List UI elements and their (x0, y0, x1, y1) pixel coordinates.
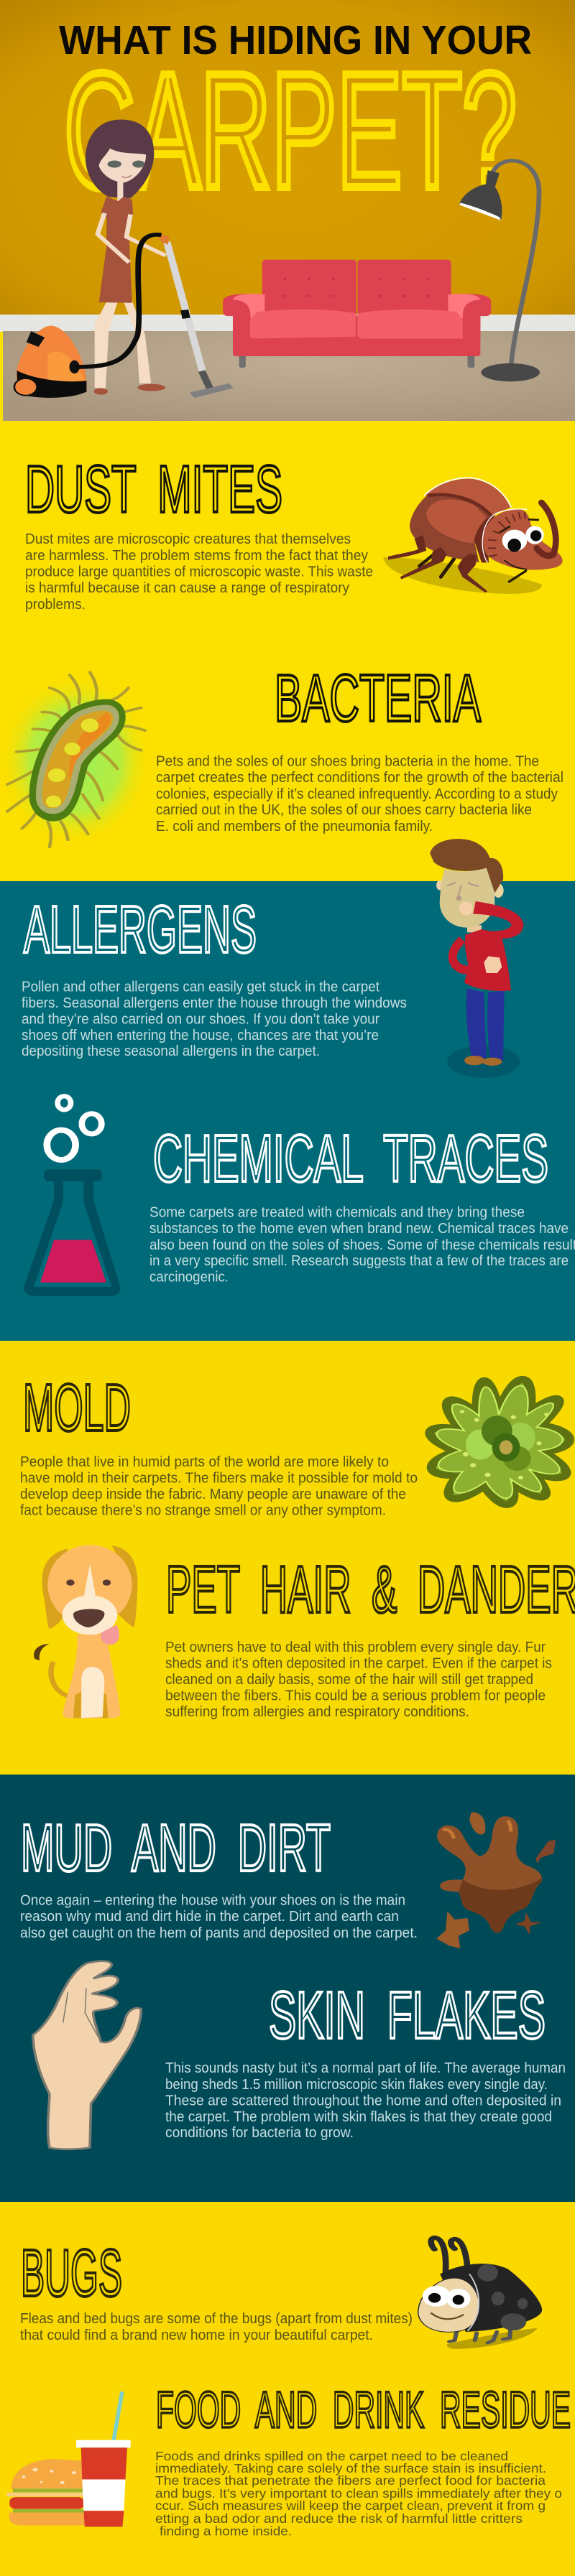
text: chemical traces: carcinogenic. (150, 1270, 229, 1285)
text: bacteria (156, 754, 564, 834)
yellow background (0, 1341, 575, 1775)
text: dust mites: Dust mites are microscopic creatures that themselves (25, 531, 351, 547)
icon: ladybug (418, 2238, 542, 2349)
text: pet hair and dander (165, 1640, 552, 1720)
text: bugs (20, 2311, 413, 2343)
text: food and drink residue (155, 2449, 562, 2538)
text: bugs: that could find a brand new home in your beautiful carpet. (20, 2328, 373, 2343)
text: mud and dirt: Once again – entering the house with your shoes on is the main (20, 1893, 405, 1909)
text: pet hair and dander: Pet owners have to deal with this problem every single day. Fur (165, 1640, 546, 1655)
text: allergens: shoes off when entering the house, chances are that you’re (22, 1028, 379, 1043)
illustration: sofa (223, 260, 491, 368)
icon: dog (34, 1545, 137, 1719)
text: food and drink residue: Foods and drinks spilled on the carpet need to be cleaned (155, 2449, 508, 2463)
text: food and drink residue: immediately. Taking care solely of the surface stain is insufficient. (155, 2461, 546, 2475)
text: chemical traces (150, 1205, 575, 1285)
text: pet hair and dander: sheds and it’s often deposited in the carpet. Even if the carpet is (165, 1656, 552, 1672)
text: bacteria: carried out in the UK, the soles of our shoes carry bacteria like (156, 802, 532, 818)
text: dust mites (25, 531, 373, 613)
text: bacteria: Pets and the soles of our shoes bring bacteria in the home. The (156, 754, 539, 770)
yellow background (0, 2202, 575, 2576)
text: dust mites: produce large quantities of microscopic waste. This waste (25, 564, 373, 580)
heading: mud and dirt: MUD AND DIRT (21, 1810, 331, 1885)
vacuum hose (75, 235, 161, 367)
panel: yellow section, bugs and food residue (0, 2202, 575, 2576)
text: pet hair and dander: cleaned on a daily basis, some of the hair will still get trapped (165, 1672, 533, 1688)
text: bacteria: carpet creates the perfect conditions for the growth of the bacterial (156, 770, 564, 786)
text: mud and dirt: reason why mud and dirt hide in the carpet. Dirt and earth can (20, 1909, 399, 1925)
panel: teal section, allergens and chemical traces (0, 839, 575, 1341)
text: skin flakes (165, 2060, 566, 2141)
text: chemical traces: Some carpets are treated with chemicals and they bring these (150, 1205, 525, 1221)
text: bugs: Fleas and bed bugs are some of the bugs (apart from dust mites) (20, 2311, 413, 2327)
text: mold: People that live in humid parts of the world are more likely to (20, 1454, 389, 1470)
text: bacteria: E. coli and members of the pneumonia family. (156, 819, 433, 834)
text: pet hair and dander: suffering from allergies and respiratory conditions. (165, 1704, 469, 1720)
wall background (0, 0, 575, 316)
panel: dark teal section, mud and skin flakes (0, 1775, 575, 2203)
text: dust mites: problems. (25, 597, 86, 613)
panel: yellow section, dust mites and bacteria (0, 421, 575, 881)
icon: sneezing man (430, 839, 523, 1078)
face (99, 149, 146, 182)
text: food and drink residue: finding a home inside. (160, 2524, 292, 2538)
text: allergens (22, 979, 407, 1059)
text: mold: fact because there’s no strange smell or any other symptom. (20, 1503, 386, 1519)
text: allergens: Pollen and other allergens can easily get stuck in the carpet (22, 979, 380, 995)
text: mold: have mold in their carpets. The fibers make it possible for mold to (20, 1470, 418, 1486)
panel: yellow section, mold and pet hair (0, 1341, 575, 1775)
text: skin flakes: being sheds 1.5 million microscopic skin flakes every single day. (165, 2077, 548, 2093)
text: food and drink residue: and bugs. It’s very important to clean spills immediately after they o (155, 2486, 562, 2501)
icon: mold cell (430, 1380, 569, 1505)
title line: WHAT IS HIDING IN YOUR (59, 17, 532, 63)
text: mud and dirt (20, 1893, 418, 1941)
text: food and drink residue: ccur. Such measures will keep the carpet clean, prevent it from g (155, 2498, 546, 2513)
teal background (0, 881, 575, 1341)
icon: burger and drink (6, 2391, 131, 2527)
text: pet hair and dander: between the fibers. This could be a serious problem for people (165, 1688, 546, 1703)
hair (86, 119, 154, 198)
legs (95, 301, 151, 389)
dress (99, 197, 133, 303)
illustration: woman with vacuum cleaner (14, 119, 233, 398)
text: mold: develop deep inside the fabric. Many people are unaware of the (20, 1487, 406, 1502)
text: skin flakes: These are scattered throughout the home and often deposited in (165, 2093, 561, 2108)
icon: bacterium (0, 672, 150, 847)
text: mold (20, 1454, 418, 1519)
text: bacteria: colonies, especially if it’s cleaned infrequently. According to a study (156, 786, 558, 802)
dark teal background (0, 1775, 575, 2203)
icon: mud splat (436, 1812, 556, 1948)
yellow background (0, 421, 575, 881)
text: skin flakes: the carpet. The problem with skin flakes is that they create good (165, 2109, 552, 2125)
heading: allergens: ALLERGENS (24, 892, 257, 967)
panel: hero room scene (0, 0, 575, 421)
text: dust mites: are harmless. The problem stems from the fact that they (25, 548, 368, 564)
text: dust mites: is harmful because it can cause a range of respiratory (25, 580, 349, 596)
baseboard (0, 315, 575, 332)
text: food and drink residue: The traces that penetrate the fibers are perfect food for bacteria (155, 2473, 546, 2488)
neck (117, 179, 123, 202)
text: mud and dirt: also get caught on the hem of pants and deposited on the carpet. (20, 1925, 418, 1941)
carpet floor (3, 331, 575, 421)
text: allergens: depositing these seasonal allergens in the carpet. (22, 1043, 320, 1059)
heading: mold: MOLD (23, 1370, 131, 1445)
heading: bugs: BUGS (21, 2236, 122, 2310)
icon: dust mite (383, 478, 563, 594)
text: skin flakes: conditions for bacteria to grow. (165, 2125, 354, 2141)
illustration: floor lamp (459, 161, 540, 381)
icon: chemical flask (24, 1096, 120, 1296)
text: food and drink residue: etting a bad odor and reduce the risk of harmful little critters (155, 2511, 523, 2526)
arms (98, 213, 129, 262)
text: allergens: fibers. Seasonal allergens enter the house through the windows (22, 995, 407, 1011)
vacuum body (17, 325, 86, 397)
icon: hand (33, 1961, 141, 2149)
text: allergens: and they’re also carried on our shoes. If you don’t take your (22, 1012, 380, 1028)
vacuum wand (167, 242, 203, 371)
heading: dust mites: DUST MITES (25, 452, 282, 526)
